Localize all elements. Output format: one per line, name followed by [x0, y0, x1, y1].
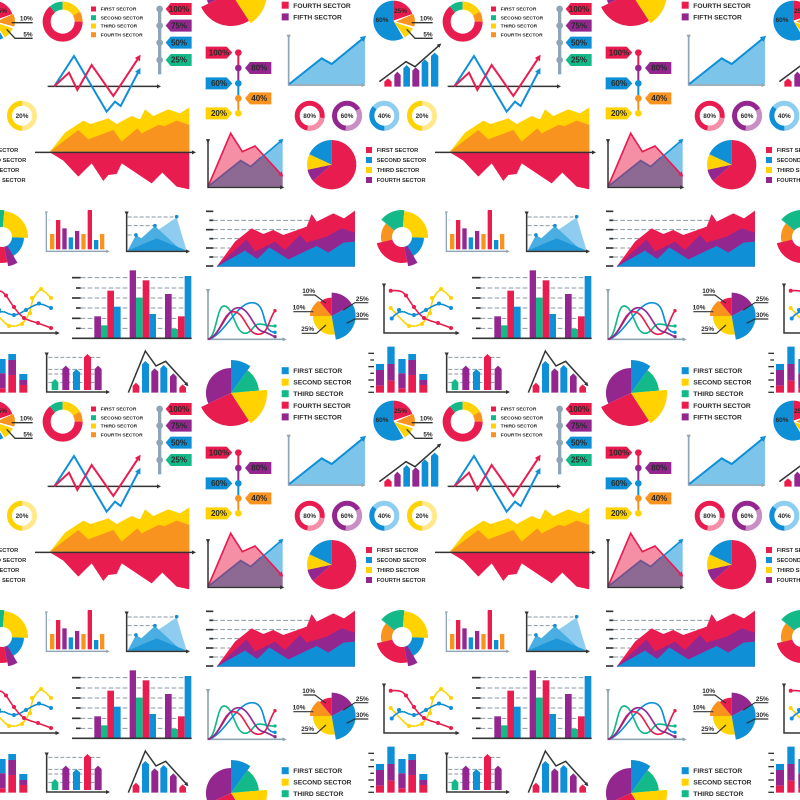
percent tags on stem: 50%	[171, 439, 187, 448]
four sector legend: THIRD SECTOR	[377, 168, 419, 174]
five sector legend: FIFTH SECTOR	[293, 414, 342, 421]
percent tags on stem	[156, 3, 192, 74]
house bars with falling line	[128, 351, 187, 393]
overlapping area chart	[608, 133, 683, 187]
exploded donut chart	[0, 610, 28, 666]
labelled pie chart: 10%	[702, 288, 715, 295]
exploded pie chart	[201, 760, 267, 800]
stacked bar chart	[768, 347, 800, 393]
exploded donut chart	[0, 210, 28, 266]
overlapping area chart	[208, 533, 283, 587]
labelled pie chart: 10%	[293, 304, 306, 312]
ring 60 percent	[330, 499, 364, 533]
stacked bar chart	[368, 747, 427, 793]
percent tags on stem: 25%	[171, 456, 187, 465]
small house bar chart	[47, 754, 108, 792]
blue area chart	[289, 37, 365, 85]
legend small	[491, 6, 544, 38]
labelled pie chart: 25%	[301, 726, 314, 733]
four sector legend: SECOND SECTOR	[377, 558, 426, 564]
mirrored area chart	[35, 107, 194, 189]
house bars with trend arrow	[379, 45, 440, 87]
pie chart with percent labels: 25%	[394, 408, 407, 415]
donut chart	[47, 6, 79, 38]
pie chart with percent labels: 10%	[420, 416, 433, 422]
exploded donut chart	[377, 610, 428, 666]
alternating percent tags: 80%	[651, 64, 667, 73]
alternating percent tags: 40%	[651, 494, 667, 503]
labelled pie chart	[293, 288, 369, 340]
grouped bar chart	[72, 270, 192, 338]
pie chart with percent labels: 10%	[20, 16, 33, 22]
alternating percent tags	[606, 447, 671, 519]
pie chart with percent labels: 60%	[376, 17, 389, 24]
stacked bar chart	[768, 747, 800, 793]
four sector legend: THIRD SECTOR	[377, 568, 419, 574]
red pie chart	[307, 140, 356, 189]
alternating percent tags: 40%	[251, 94, 267, 103]
five sector legend: FIRST SECTOR	[693, 368, 742, 375]
exploded pie chart	[601, 360, 667, 426]
thin bar chart	[446, 210, 508, 251]
two line arrow chart	[448, 456, 559, 512]
wide layered area chart	[606, 611, 755, 667]
labelled pie chart: 25%	[756, 696, 769, 703]
bell curves chart	[208, 292, 285, 339]
donut chart	[447, 6, 479, 38]
five sector legend	[682, 367, 752, 421]
legend small: SECOND SECTOR	[501, 415, 544, 421]
legend small: FIRST SECTOR	[101, 7, 137, 13]
thin bar chart	[46, 210, 108, 251]
labelled pie chart: 10%	[693, 704, 706, 712]
pie chart with percent labels	[773, 1, 800, 41]
line chart with dots	[384, 286, 458, 333]
legend small: FIRST SECTOR	[101, 407, 137, 413]
mirrored area chart	[35, 507, 194, 589]
pie chart with percent labels: 60%	[376, 417, 389, 424]
ring 80 percent	[695, 101, 724, 130]
ring 60 percent: 60%	[341, 513, 354, 520]
layered triangle chart	[527, 214, 588, 251]
four sector legend: FIRST SECTOR	[377, 148, 418, 154]
alternating percent tags: 100%	[609, 48, 629, 57]
four sector legend	[0, 547, 26, 584]
ring 80 percent	[695, 501, 724, 530]
legend small: THIRD SECTOR	[501, 424, 538, 430]
legend small: FIRST SECTOR	[501, 7, 537, 13]
alternating percent tags: 40%	[651, 94, 667, 103]
five sector legend: SECOND SECTOR	[293, 780, 352, 787]
ring 20 percent: 20%	[16, 113, 29, 120]
five sector legend	[282, 767, 352, 800]
house bars with falling line	[128, 751, 187, 793]
labelled pie chart: 10%	[302, 688, 315, 695]
four sector legend	[366, 547, 426, 584]
small house bar chart	[447, 754, 508, 792]
labelled pie chart: 25%	[356, 696, 369, 703]
ring 20 percent: 20%	[416, 513, 429, 520]
pie chart with percent labels	[373, 1, 433, 41]
legend small: SECOND SECTOR	[101, 415, 144, 421]
red pie chart	[707, 140, 756, 189]
wide layered area chart	[606, 211, 755, 267]
ring 20 percent: 20%	[416, 113, 429, 120]
four sector legend	[766, 147, 800, 184]
ring 40 percent: 40%	[778, 513, 791, 520]
alternating percent tags	[206, 47, 271, 119]
line chart with dots	[0, 686, 58, 733]
donut chart	[447, 406, 479, 438]
legend small: FOURTH SECTOR	[101, 32, 143, 38]
blue area chart	[689, 437, 765, 485]
pie chart with percent labels: 5%	[423, 432, 433, 438]
five sector legend: FIRST SECTOR	[693, 768, 742, 775]
house bars with falling line	[528, 351, 587, 393]
layered triangle chart	[127, 614, 188, 651]
blue area chart	[289, 437, 365, 485]
alternating percent tags: 20%	[611, 109, 627, 118]
alternating percent tags: 80%	[251, 64, 267, 73]
pie chart with percent labels: 5%	[23, 32, 33, 38]
percent tags on stem: 75%	[171, 22, 187, 31]
five sector legend: FOURTH SECTOR	[293, 3, 351, 10]
legend small: SECOND SECTOR	[501, 15, 544, 21]
percent tags on stem: 100%	[569, 5, 589, 14]
exploded donut chart	[777, 210, 800, 266]
five sector legend: THIRD SECTOR	[293, 391, 344, 398]
percent tags on stem: 75%	[571, 22, 587, 31]
red pie chart	[707, 540, 756, 589]
legend small: THIRD SECTOR	[101, 24, 138, 30]
wide layered area chart	[206, 611, 355, 667]
thin bar chart	[46, 610, 108, 651]
two line arrow chart	[48, 456, 159, 512]
five sector legend: THIRD SECTOR	[693, 391, 744, 398]
top-edge wrapped charts, left column	[201, 0, 352, 26]
ring 40 percent	[772, 503, 797, 528]
grouped bar chart	[472, 270, 592, 338]
stacked bar chart	[368, 347, 427, 393]
legend small: THIRD SECTOR	[101, 424, 138, 430]
labelled pie chart: 10%	[302, 288, 315, 295]
four sector legend	[366, 147, 426, 184]
percent tags on stem: 25%	[571, 456, 587, 465]
exploded pie chart	[601, 760, 667, 800]
mirrored area chart	[435, 507, 594, 589]
line chart with dots	[384, 686, 458, 733]
percent tags on stem: 25%	[171, 56, 187, 65]
alternating percent tags: 100%	[209, 48, 229, 57]
bell curves chart	[208, 692, 285, 739]
stacked bar chart	[0, 347, 27, 393]
ring 20 percent	[10, 503, 34, 528]
labelled pie chart: 10%	[693, 304, 706, 312]
ring 60 percent	[330, 99, 364, 133]
small house bar chart	[447, 354, 508, 392]
percent tags on stem: 100%	[169, 5, 189, 14]
percent tags on stem: 50%	[571, 39, 587, 48]
pie chart with percent labels: 10%	[20, 416, 33, 422]
legend small	[91, 6, 144, 38]
four sector legend: FOURTH SECTOR	[377, 178, 426, 184]
two line arrow chart	[48, 56, 159, 112]
pie chart with percent labels: 60%	[776, 417, 789, 424]
bell curves chart	[608, 692, 685, 739]
grouped bar chart	[472, 670, 592, 738]
blue area chart	[689, 37, 765, 85]
ring 80 percent: 80%	[303, 513, 316, 520]
exploded pie chart	[201, 360, 267, 426]
pie chart with percent labels	[373, 401, 433, 441]
legend small: FOURTH SECTOR	[501, 432, 543, 438]
labelled pie chart: 10%	[293, 704, 306, 712]
pie chart with percent labels	[0, 401, 33, 441]
legend small: SECOND SECTOR	[101, 15, 144, 21]
five sector legend: SECOND SECTOR	[293, 380, 352, 387]
alternating percent tags: 80%	[651, 464, 667, 473]
pie chart with percent labels: 5%	[423, 32, 433, 38]
alternating percent tags	[206, 447, 271, 519]
alternating percent tags: 80%	[251, 464, 267, 473]
ring 20 percent	[410, 103, 434, 128]
five sector legend	[682, 767, 752, 800]
four sector legend: SECOND SECTOR	[377, 158, 426, 164]
alternating percent tags: 20%	[211, 509, 227, 518]
percent tags on stem: 50%	[571, 439, 587, 448]
top-edge wrapped charts, right column	[601, 0, 752, 26]
ring 20 percent	[10, 103, 34, 128]
labelled pie chart: 30%	[356, 712, 369, 719]
ring 60 percent: 60%	[341, 113, 354, 120]
house bars with falling line	[528, 751, 587, 793]
ring 60 percent	[730, 499, 764, 533]
pattern tile top right	[410, 1, 800, 426]
ring 60 percent	[730, 99, 764, 133]
ring 80 percent: 80%	[703, 113, 716, 120]
alternating percent tags: 40%	[251, 494, 267, 503]
ring 40 percent: 40%	[378, 113, 391, 120]
exploded pie chart	[201, 0, 267, 26]
labelled pie chart	[693, 288, 769, 340]
alternating percent tags: 100%	[609, 448, 629, 457]
ring 80 percent: 80%	[703, 513, 716, 520]
five sector legend	[282, 367, 352, 421]
ring 40 percent: 40%	[778, 113, 791, 120]
ring 80 percent	[295, 101, 324, 130]
alternating percent tags	[606, 47, 671, 119]
alternating percent tags: 60%	[211, 479, 227, 488]
layered triangle chart	[527, 614, 588, 651]
percent tags on stem: 100%	[569, 405, 589, 414]
overlapping area chart	[208, 133, 283, 187]
percent tags on stem: 25%	[571, 56, 587, 65]
labelled pie chart: 30%	[756, 312, 769, 319]
pie chart with percent labels	[773, 401, 800, 441]
line chart with dots	[0, 286, 58, 333]
five sector legend: FIFTH SECTOR	[693, 14, 742, 21]
house bars with trend arrow	[779, 45, 800, 87]
labelled pie chart	[693, 688, 769, 740]
pattern tile top left	[10, 1, 458, 426]
pie chart with percent labels: 5%	[23, 432, 33, 438]
ring 80 percent	[295, 501, 324, 530]
labelled pie chart: 25%	[756, 296, 769, 303]
ring 40 percent	[772, 103, 797, 128]
alternating percent tags: 100%	[209, 448, 229, 457]
five sector legend: FIRST SECTOR	[293, 368, 342, 375]
exploded pie chart	[601, 0, 667, 26]
alternating percent tags: 20%	[211, 109, 227, 118]
ring 80 percent: 80%	[303, 113, 316, 120]
line chart with dots	[784, 286, 800, 333]
left-edge wrapped charts, upper row	[0, 1, 58, 393]
stacked bar chart	[0, 747, 27, 793]
alternating percent tags: 60%	[211, 79, 227, 88]
grouped bar chart	[72, 670, 192, 738]
line chart with dots	[784, 686, 800, 733]
four sector legend	[0, 147, 26, 184]
labelled pie chart: 25%	[701, 326, 714, 333]
pie chart with percent labels	[0, 1, 33, 41]
exploded donut chart	[777, 610, 800, 666]
four sector legend: FOURTH SECTOR	[377, 578, 426, 584]
pattern tile bottom right	[410, 401, 800, 800]
ring 40 percent: 40%	[378, 513, 391, 520]
house bars with trend arrow	[379, 445, 440, 487]
five sector legend	[682, 0, 752, 21]
alternating percent tags: 20%	[611, 509, 627, 518]
layered triangle chart	[127, 214, 188, 251]
percent tags on stem	[556, 403, 592, 474]
four sector legend	[766, 547, 800, 584]
five sector legend: SECOND SECTOR	[693, 780, 752, 787]
percent tags on stem: 75%	[571, 422, 587, 431]
legend small	[491, 406, 544, 438]
five sector legend: FOURTH SECTOR	[293, 403, 351, 410]
labelled pie chart: 25%	[301, 326, 314, 333]
pie chart with percent labels: 25%	[394, 8, 407, 15]
percent tags on stem: 100%	[169, 405, 189, 414]
left-edge wrapped charts, lower row	[0, 401, 58, 793]
pie chart with percent labels: 10%	[420, 16, 433, 22]
five sector legend: FOURTH SECTOR	[693, 403, 751, 410]
pie chart with percent labels: 60%	[776, 17, 789, 24]
percent tags on stem	[156, 403, 192, 474]
five sector legend: THIRD SECTOR	[293, 791, 344, 798]
five sector legend: FIFTH SECTOR	[293, 14, 342, 21]
percent tags on stem: 75%	[171, 422, 187, 431]
mirrored area chart	[435, 107, 594, 189]
pattern tile bottom left	[10, 401, 458, 800]
small house bar chart	[47, 354, 108, 392]
legend small: FOURTH SECTOR	[501, 32, 543, 38]
four sector legend: FIRST SECTOR	[377, 548, 418, 554]
labelled pie chart: 25%	[356, 296, 369, 303]
five sector legend: FIRST SECTOR	[293, 768, 342, 775]
ring 20 percent	[410, 503, 434, 528]
five sector legend	[282, 0, 352, 21]
legend small: FOURTH SECTOR	[101, 432, 143, 438]
percent tags on stem	[556, 3, 592, 74]
bell curves chart	[608, 292, 685, 339]
labelled pie chart: 30%	[356, 312, 369, 319]
house bars with trend arrow	[779, 445, 800, 487]
labelled pie chart: 30%	[756, 712, 769, 719]
percent tags on stem: 50%	[171, 39, 187, 48]
overlapping area chart	[608, 533, 683, 587]
ring 20 percent: 20%	[16, 513, 29, 520]
thin bar chart	[446, 610, 508, 651]
five sector legend: FIFTH SECTOR	[693, 414, 742, 421]
red pie chart	[307, 540, 356, 589]
alternating percent tags: 60%	[611, 479, 627, 488]
alternating percent tags: 60%	[611, 79, 627, 88]
ring 40 percent	[372, 503, 397, 528]
two line arrow chart	[448, 56, 559, 112]
ring 60 percent: 60%	[741, 513, 754, 520]
ring 40 percent	[372, 103, 397, 128]
exploded donut chart	[377, 210, 428, 266]
legend small: FIRST SECTOR	[501, 407, 537, 413]
five sector legend: THIRD SECTOR	[693, 791, 744, 798]
labelled pie chart: 25%	[701, 726, 714, 733]
ring 60 percent: 60%	[741, 113, 754, 120]
legend small	[91, 406, 144, 438]
five sector legend: SECOND SECTOR	[693, 380, 752, 387]
five sector legend: FOURTH SECTOR	[693, 3, 751, 10]
wide layered area chart	[206, 211, 355, 267]
legend small: THIRD SECTOR	[501, 24, 538, 30]
donut chart	[47, 406, 79, 438]
labelled pie chart	[293, 688, 369, 740]
labelled pie chart: 10%	[702, 688, 715, 695]
